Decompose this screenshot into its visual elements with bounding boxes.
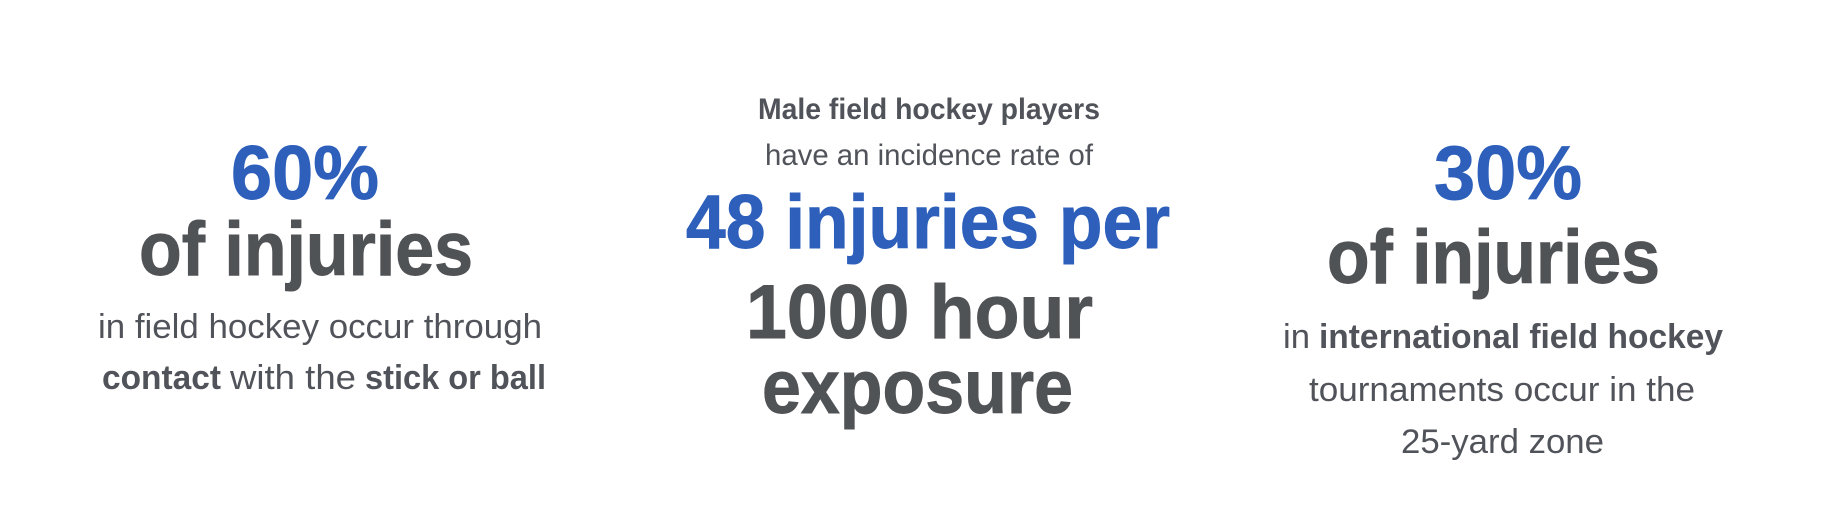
text: Male field hockey players: Male field hockey players: [758, 93, 1100, 126]
panel: incidence rate statistic: [686, 93, 1170, 430]
text: in international field hockey: in: [1283, 318, 1310, 356]
text: have an incidence rate of: have an incidence rate of: [765, 139, 1094, 172]
text: tournaments occur in the: tournaments occur in the: [1309, 371, 1695, 409]
text: 25-yard zone: 25-yard zone: [1401, 423, 1604, 461]
stat: 30%: 30%: [1434, 131, 1582, 216]
text: contact with the stick or ball: contact: [102, 359, 221, 397]
panel: contact injuries statistic: [98, 131, 546, 397]
heading: of injuries: of injuries: [139, 207, 473, 292]
stat: 60%: 60%: [231, 131, 379, 216]
heading: 1000 hour: 1000 hour: [746, 270, 1093, 355]
heading: exposure: exposure: [762, 345, 1073, 430]
panel: 25-yard zone statistic: [1283, 131, 1723, 461]
text: contact with the stick or ball: [102, 359, 546, 397]
text: in field hockey occur through: in field hockey occur through: [98, 308, 542, 346]
stat: 48 injuries per: 48 injuries per: [686, 180, 1170, 265]
text: in international field hockey: international field hockey: [1319, 318, 1723, 356]
heading: of injuries: of injuries: [1327, 215, 1660, 300]
text: contact with the stick or ball: with the: [229, 359, 356, 397]
text: contact with the stick or ball: stick or ball: [365, 359, 546, 397]
